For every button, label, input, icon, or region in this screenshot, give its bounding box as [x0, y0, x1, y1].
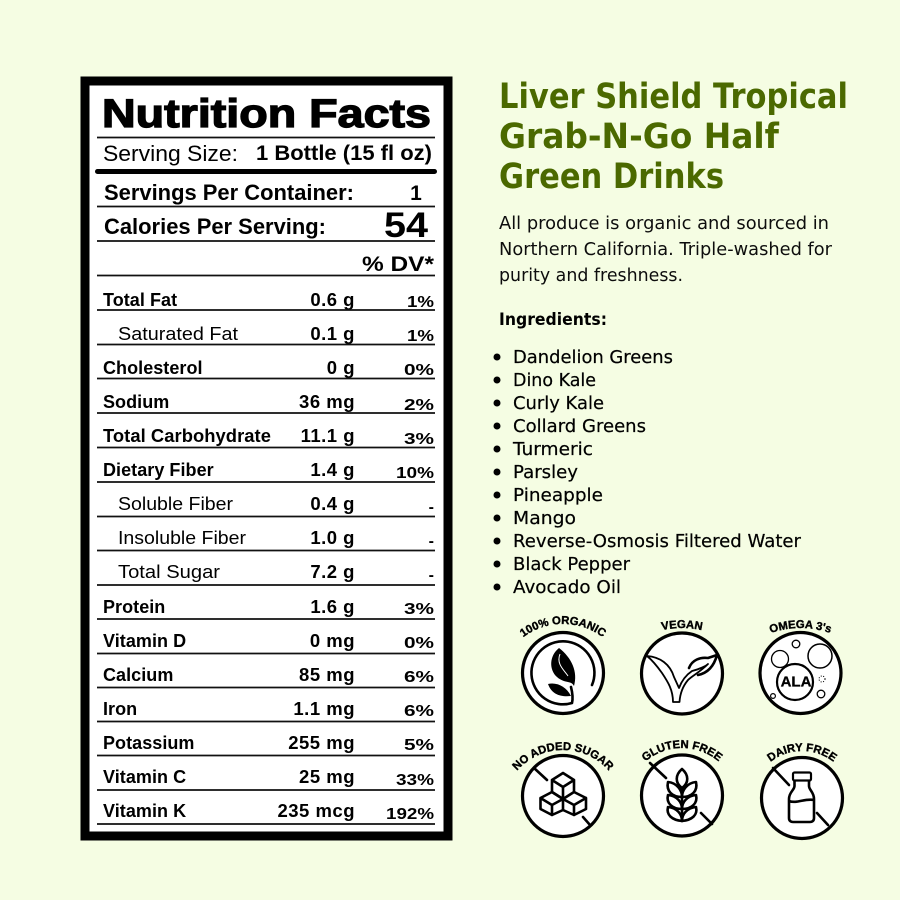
calories row: 54 — [384, 206, 429, 245]
row: Protein — [97, 596, 435, 619]
row: Protein: Protein — [103, 597, 165, 617]
heading: product title — [499, 77, 848, 197]
ingredients list: Pineapple — [513, 485, 603, 506]
icon: gluten free: GLUTEN FREE — [642, 740, 724, 762]
text block: sourcing description: All produce is organic and sourced in — [499, 214, 829, 234]
servings per container row: Servings Per Container: — [104, 180, 354, 205]
row: Protein: 1.6 g — [310, 596, 355, 617]
row: Calcium: 85 mg — [299, 664, 355, 685]
calories row: Calories Per Serving: — [104, 214, 326, 239]
serving size row: 1 Bottle (15 fl oz) — [256, 141, 432, 165]
icon: 100% organic: 100% ORGANIC — [520, 616, 606, 638]
row: Soluble Fiber: Soluble Fiber — [118, 494, 233, 514]
row: Total Sugar: Total Sugar — [118, 562, 220, 582]
row: Iron — [97, 698, 435, 722]
row: Vitamin C: 25 mg — [299, 766, 355, 787]
row: Vitamin K: 235 mcg — [277, 800, 355, 821]
text block: sourcing description: Northern California. Triple-washed for — [499, 240, 833, 260]
heading: product title: Liver Shield Tropical — [499, 77, 848, 117]
row: Dietary Fiber — [97, 459, 435, 482]
ingredients list: Black Pepper — [513, 554, 631, 575]
row: Cholesterol: 0 g — [327, 357, 355, 378]
row: Cholesterol: 0% — [404, 362, 434, 379]
row: Soluble Fiber: 0.4 g — [310, 493, 355, 514]
row: Insoluble Fiber: Insoluble Fiber — [118, 528, 246, 548]
row: Vitamin D — [97, 630, 435, 654]
row: Protein: 3% — [404, 601, 434, 618]
row: Insoluble Fiber: - — [429, 533, 434, 550]
row: Dietary Fiber: Dietary Fiber — [103, 460, 214, 480]
row: Total Carbohydrate: 3% — [404, 431, 434, 448]
row: Soluble Fiber — [97, 493, 435, 516]
row: Saturated Fat: Saturated Fat — [118, 324, 238, 344]
icon: omega 3s: OMEGA 3's — [770, 620, 832, 633]
icon: dairy free: DAIRY FREE — [766, 743, 838, 762]
row: Vitamin C: Vitamin C — [103, 767, 186, 787]
row: Vitamin C: 33% — [396, 772, 434, 789]
row: Vitamin K — [97, 800, 435, 824]
row: Vitamin D: Vitamin D — [103, 631, 186, 651]
row: Vitamin K: Vitamin K — [103, 801, 186, 821]
row: Insoluble Fiber: 1.0 g — [310, 527, 355, 548]
row: Potassium: 255 mg — [288, 732, 355, 753]
calories row — [104, 206, 429, 245]
icon: no added sugar — [512, 742, 614, 838]
row: Saturated Fat — [97, 323, 435, 345]
row: Total Carbohydrate — [97, 425, 435, 448]
heading: Nutrition Facts: Nutrition Facts — [102, 92, 431, 136]
heading: product title: Grab-N-Go Half — [499, 117, 780, 157]
panel: nutrition facts label — [85, 81, 448, 836]
ingredients list: Dino Kale — [513, 370, 596, 391]
icon: 100% organic — [520, 616, 606, 716]
row: Sodium — [97, 391, 435, 414]
row: Total Fat: Total Fat — [103, 290, 177, 310]
row: Total Sugar: - — [429, 567, 434, 584]
heading: product title: Green Drinks — [499, 157, 724, 197]
ingredients list: Curly Kale — [513, 393, 604, 414]
ingredients list: Parsley — [513, 462, 578, 483]
row: Potassium — [97, 732, 435, 756]
row: Iron: 6% — [404, 703, 434, 720]
row: Total Fat — [97, 289, 435, 311]
serving size row — [103, 141, 432, 166]
row: Total Fat: 1% — [407, 294, 434, 311]
row: Dietary Fiber: 1.4 g — [310, 459, 355, 480]
row: Vitamin C — [97, 766, 435, 790]
row: Total Carbohydrate: Total Carbohydrate — [103, 426, 271, 446]
daily value header: % DV* — [362, 253, 435, 276]
icon: no added sugar: NO ADDED SUGAR — [512, 742, 614, 771]
ingredients list: Dandelion Greens — [513, 347, 673, 368]
row: Vitamin K: 192% — [386, 806, 434, 823]
row: Calcium: 6% — [404, 669, 434, 686]
row: Cholesterol: Cholesterol — [103, 358, 203, 378]
ingredients list: Collard Greens — [513, 416, 646, 437]
row: Sodium: 36 mg — [299, 391, 355, 412]
row: Insoluble Fiber — [97, 527, 435, 550]
row: Sodium: Sodium — [103, 392, 169, 412]
icon: omega 3s: ALA — [781, 674, 812, 690]
row: Calcium — [97, 664, 435, 688]
row: Cholesterol — [97, 357, 435, 379]
ingredients list: Reverse-Osmosis Filtered Water — [513, 531, 802, 552]
row: Soluble Fiber: - — [429, 499, 434, 516]
ingredients list: Avocado Oil — [513, 577, 621, 598]
row: Dietary Fiber: 10% — [396, 465, 434, 482]
row: Iron: 1.1 mg — [293, 698, 355, 719]
icon: gluten free — [640, 740, 724, 838]
icon: omega 3s — [758, 620, 843, 716]
row: Saturated Fat: 0.1 g — [310, 323, 355, 344]
row: Calcium: Calcium — [103, 665, 173, 685]
row: Vitamin D: 0% — [404, 635, 434, 652]
row: Potassium: 5% — [404, 737, 434, 754]
ingredients list — [494, 347, 802, 598]
icon: vegan: VEGAN — [660, 620, 703, 630]
heading: Ingredients: Ingredients: — [499, 310, 607, 330]
serving size row: Serving Size: — [103, 141, 238, 166]
row: Total Sugar: 7.2 g — [310, 561, 355, 582]
row: Sodium: 2% — [404, 397, 434, 414]
icon: dairy free — [760, 743, 844, 840]
text block: sourcing description — [499, 214, 833, 286]
ingredients list: Turmeric — [512, 439, 593, 460]
row: Total Carbohydrate: 11.1 g — [301, 425, 355, 446]
row: Total Fat: 0.6 g — [310, 289, 355, 310]
text block: sourcing description: purity and freshness. — [499, 266, 683, 286]
icon: vegan — [640, 620, 724, 716]
row: Iron: Iron — [103, 699, 137, 719]
row: Saturated Fat: 1% — [407, 328, 434, 345]
ingredients list: Mango — [513, 508, 576, 529]
row: Total Sugar — [97, 561, 435, 585]
row: Potassium: Potassium — [103, 733, 194, 753]
row: Vitamin D: 0 mg — [310, 630, 355, 651]
servings per container row: 1 — [410, 182, 422, 205]
